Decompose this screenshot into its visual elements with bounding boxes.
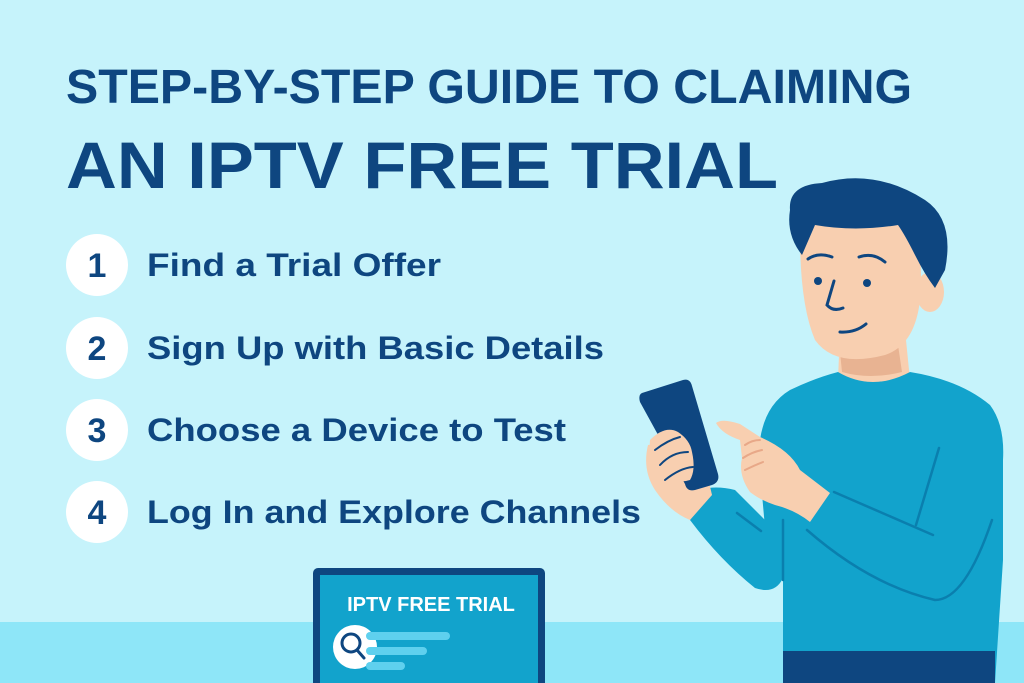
steps list bbox=[66, 234, 641, 543]
phone bbox=[639, 380, 718, 490]
ear bbox=[916, 272, 944, 312]
step 4: 4 bbox=[88, 494, 107, 532]
step 2: Sign Up with Basic Details bbox=[147, 330, 604, 366]
step 1: 1 bbox=[88, 247, 106, 285]
neck bbox=[838, 330, 910, 388]
hand holding phone bbox=[646, 440, 712, 520]
step 3: Choose a Device to Test bbox=[147, 412, 566, 448]
laptop screen: IPTV FREE TRIAL bbox=[347, 594, 515, 616]
pointing hand bbox=[716, 421, 830, 522]
pants bbox=[783, 651, 995, 683]
step 4 bbox=[66, 481, 641, 543]
holding fingers bbox=[650, 430, 694, 482]
title: STEP-BY-STEP GUIDE TO CLAIMING bbox=[66, 61, 912, 114]
face bbox=[800, 198, 921, 359]
title: AN IPTV FREE TRIAL bbox=[66, 128, 778, 202]
laptop screen bbox=[313, 568, 545, 683]
left sleeve arm bbox=[690, 488, 783, 590]
person illustration bbox=[639, 178, 1003, 683]
eyes / mouth bbox=[814, 277, 871, 287]
step 1: Find a Trial Offer bbox=[147, 247, 441, 283]
step 2 bbox=[66, 317, 604, 379]
step 1 bbox=[66, 234, 441, 296]
step 3: 3 bbox=[88, 412, 106, 450]
icon: search bbox=[333, 625, 377, 669]
shirt fold lines bbox=[737, 448, 992, 600]
step 3 bbox=[66, 399, 566, 461]
step 2: 2 bbox=[88, 330, 106, 368]
title bbox=[66, 61, 912, 202]
step 4: Log In and Explore Channels bbox=[147, 494, 641, 530]
hair bbox=[789, 178, 948, 288]
torso / shirt bbox=[760, 372, 1003, 683]
